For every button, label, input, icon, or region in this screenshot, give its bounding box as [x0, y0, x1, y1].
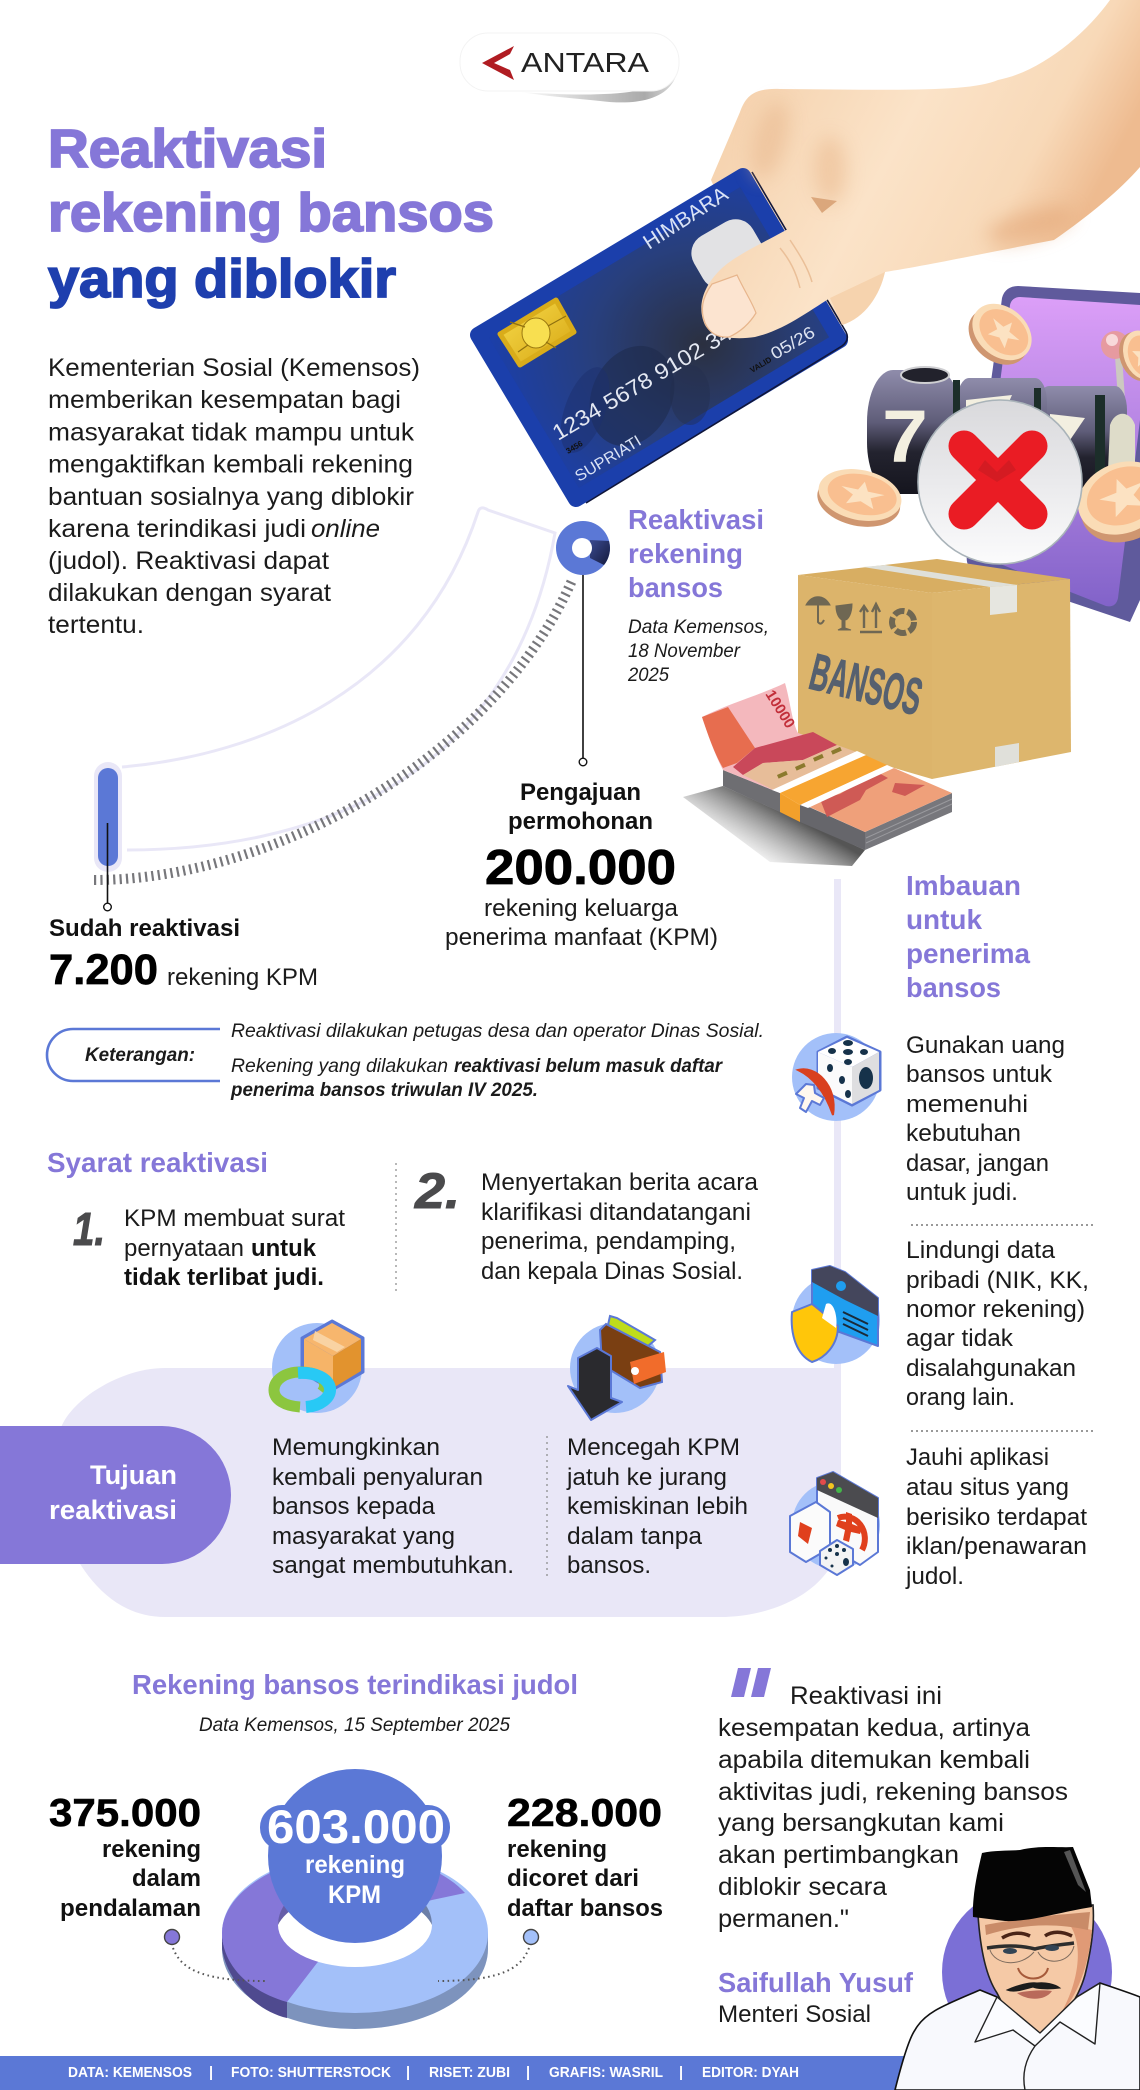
illustration: tablet with slot machine and X: [812, 286, 1140, 622]
stat: sudah reaktivasi 7.200: 7.200: [49, 946, 158, 994]
intro text block: karena terindikasi judi: [48, 515, 306, 543]
hand shading: [744, 97, 1077, 250]
donut chart: 603.000: rekening: [305, 1851, 405, 1879]
intro text block: tertentu.: [48, 611, 144, 639]
title: yang diblokir: [48, 249, 396, 309]
advice 3 text: judol.: [905, 1563, 964, 1590]
box handling symbols: [806, 597, 914, 633]
tujuan text 2: dalam tanpa: [567, 1523, 702, 1550]
heading: reaktivasi rekening bansos: Reaktivasi: [628, 504, 764, 535]
intro text block: [48, 354, 420, 639]
title: Reaktivasi: [48, 119, 327, 179]
note: keterangan: Keterangan:: [85, 1045, 195, 1066]
requirement 2: klarifikasi ditandatangani: [481, 1199, 751, 1226]
bank card: 1234 5678 9102 34: [548, 320, 736, 445]
advice 2 text: [906, 1237, 1089, 1411]
heading: reaktivasi rekening bansos: 18 November: [628, 641, 741, 662]
quote: kesempatan kedua, artinya: [718, 1714, 1030, 1742]
speaker name: Saifullah Yusuf: [718, 1967, 914, 1998]
bank card: 05/26: [767, 323, 818, 363]
stat: sudah reaktivasi 7.200: rekening KPM: [167, 964, 318, 991]
advice 3 text: berisiko terdapat: [906, 1504, 1087, 1531]
intro text block: bantuan sosialnya yang diblokir: [48, 483, 414, 511]
requirement 1: KPM membuat surat: [124, 1205, 345, 1232]
tujuan text 2: bansos.: [567, 1552, 651, 1579]
tujuan text 1: kembali penyaluran: [272, 1464, 483, 1491]
footer credits: |: [526, 2065, 530, 2081]
callout: 375.000: dalam: [132, 1865, 201, 1892]
lever: [1101, 331, 1129, 419]
footer credits: |: [679, 2065, 683, 2081]
hand palm: [711, 0, 1140, 325]
intro text block: online: [311, 515, 380, 543]
callout: 375.000: pendalaman: [60, 1895, 201, 1922]
slot reels: 7: [882, 395, 928, 478]
requirement 2: Menyertakan berita acara: [481, 1169, 758, 1196]
quote: diblokir secara: [718, 1873, 887, 1901]
advice 2 text: agar tidak: [906, 1325, 1014, 1352]
stat: pengajuan permohonan 200.000: penerima manfaat (KPM): [445, 924, 718, 951]
footer credits: GRAFIS: WASRIL: [549, 2065, 663, 2081]
quote: akan pertimbangkan: [718, 1841, 959, 1869]
tujuan text 1: masyarakat yang: [272, 1523, 455, 1550]
stat: sudah reaktivasi 7.200: Sudah reaktivasi: [49, 915, 240, 942]
intro text block: masyarakat tidak mampu untuk: [48, 418, 415, 446]
panel: syarat reaktivasi: [47, 1147, 758, 1291]
callout: 228.000: rekening: [507, 1836, 607, 1863]
tablet: [967, 286, 1140, 622]
advice 3 text: iklan/penawaran: [906, 1533, 1087, 1560]
donut chart: 603.000: [222, 1769, 488, 2029]
footer credits: |: [406, 2065, 410, 2081]
tujuan text 1: [272, 1434, 514, 1579]
panel: tujuan reaktivasi: [0, 1368, 841, 1617]
heading: reaktivasi rekening bansos: rekening: [628, 538, 743, 569]
logo: Antara: ANTARA: [521, 47, 649, 78]
advice 1 text: untuk judi.: [906, 1179, 1018, 1206]
coin top: [957, 292, 1043, 376]
callout: 228.000: 228.000: [507, 1792, 662, 1835]
requirement 1: tidak terlibat judi.: [124, 1264, 324, 1291]
coins: [812, 325, 1140, 555]
stat: pengajuan permohonan 200.000: permohonan: [508, 808, 653, 835]
tujuan text 1: sangat membutuhkan.: [272, 1552, 514, 1579]
footer credits: RISET: ZUBI: [429, 2065, 510, 2081]
marker: applications ring: [556, 521, 610, 766]
quote: permanen.": [718, 1905, 849, 1933]
donut chart: 603.000: 603.000: [267, 1800, 445, 1853]
stat: pengajuan permohonan 200.000: rekening keluarga: [484, 895, 678, 922]
bank card: VALID: [748, 355, 773, 375]
tujuan label pill: Tujuan: [90, 1460, 177, 1490]
illustration: bundle of rupiah money: [683, 683, 952, 866]
note: keterangan: penerima bansos triwulan IV 2025.: [230, 1080, 538, 1101]
stat: pengajuan permohonan 200.000: 200.000: [485, 841, 676, 895]
heading: imbauan: untuk: [906, 904, 982, 935]
requirement 1: 1.: [73, 1203, 105, 1255]
donut hole: [278, 1883, 432, 1967]
requirement 2: penerima, pendamping,: [481, 1228, 736, 1255]
advice 3 text: [905, 1444, 1087, 1590]
quote: yang bersangkutan kami: [718, 1809, 1004, 1837]
callout: 228.000: [438, 1792, 663, 1981]
note: keterangan: Reaktivasi dilakukan petugas desa dan operator Dinas Sosial.: [231, 1021, 764, 1042]
advice 1 text: dasar, jangan: [906, 1150, 1049, 1177]
icon: gambling website window: [790, 1472, 880, 1575]
requirement 1: [73, 1203, 345, 1291]
quote: apabila ditemukan kembali: [718, 1746, 1030, 1774]
bank card: [478, 172, 847, 503]
face: [978, 1905, 1093, 2036]
moustache: [1007, 1983, 1060, 1991]
title: [48, 119, 494, 309]
tujuan text 2: kemiskinan lebih: [567, 1493, 748, 1520]
donut chart: 603.000: KPM: [328, 1881, 381, 1909]
tujuan text 2: [566, 1434, 748, 1579]
speaker name: [718, 1967, 914, 2028]
heading: reaktivasi rekening bansos: 2025: [627, 665, 669, 686]
stat: pengajuan permohonan 200.000: Pengajuan: [520, 779, 641, 806]
requirement 2: [414, 1163, 758, 1285]
heading: reaktivasi rekening bansos: [627, 504, 769, 686]
quote mark: [731, 1668, 771, 1697]
illustration: bansos cardboard box: BANSOS: [804, 643, 928, 727]
heading: imbauan: penerima: [906, 938, 1030, 969]
note: keterangan: reaktivasi belum masuk daftar: [454, 1056, 724, 1077]
vertical divider of advice column: [834, 879, 841, 1374]
footer bar: [0, 2056, 1140, 2090]
advice 3 text: Jauhi aplikasi: [906, 1444, 1049, 1471]
heading: reaktivasi rekening bansos: Data Kemensos,: [628, 617, 769, 638]
illustration: bansos cardboard box: [798, 559, 1071, 779]
icon: id card with shield: [792, 1266, 880, 1364]
advice 3 text: atau situs yang: [906, 1474, 1069, 1501]
quote: aktivitas judi, rekening bansos: [718, 1778, 1068, 1806]
panel: syarat reaktivasi: Syarat reaktivasi: [47, 1147, 268, 1178]
callout: 375.000: 375.000: [49, 1792, 201, 1835]
intro text block: dilakukan dengan syarat: [48, 579, 331, 607]
intro text block: mengaktifkan kembali rekening: [48, 450, 413, 478]
advice 1 text: kebutuhan: [906, 1120, 1021, 1147]
peci hat: [973, 1847, 1092, 1921]
footer credits: DATA: KEMENSOS: [68, 2065, 192, 2081]
bank card: SUPRIATI: [572, 433, 644, 485]
tujuan label pill: [0, 1426, 231, 1564]
advice 1 text: Gunakan uang: [906, 1032, 1065, 1059]
bank card: HIMBARA: [639, 183, 732, 254]
footer credits: FOTO: SHUTTERSTOCK: [231, 2065, 392, 2081]
red X badge: [918, 400, 1082, 564]
title: rekening bansos: [48, 183, 494, 243]
heading: imbauan: Imbauan: [906, 870, 1021, 901]
heading: rekening bansos terindikasi judol: [132, 1669, 578, 1736]
advice 2 text: nomor rekening): [906, 1296, 1085, 1323]
icon: dice with cross: [792, 1033, 880, 1121]
advice 1 text: memenuhi: [906, 1091, 1028, 1118]
intro text block: memberikan kesempatan bagi: [48, 386, 401, 414]
stat: pengajuan permohonan 200.000: [445, 779, 718, 951]
slot reels: [867, 367, 1135, 500]
advice 1 text: bansos untuk: [906, 1061, 1053, 1088]
quote: Reaktivasi ini: [790, 1682, 942, 1710]
callout: 228.000: dicoret dari: [507, 1865, 639, 1892]
callout: 228.000: daftar bansos: [507, 1895, 663, 1922]
tujuan text 1: Memungkinkan: [272, 1434, 440, 1461]
advice 2 text: orang lain.: [906, 1384, 1015, 1411]
note: keterangan: [47, 1021, 764, 1101]
requirement 2: 2.: [414, 1163, 460, 1219]
centre ball: [268, 1769, 442, 1943]
tujuan text 2: jatuh ke jurang: [566, 1464, 727, 1491]
collar: [975, 1983, 1100, 2090]
logo: Antara: [460, 33, 679, 102]
illustration: hand holding bank card: [478, 0, 1140, 503]
tujuan label pill: reaktivasi: [49, 1495, 177, 1525]
icon: box with recycle arrows: [272, 1321, 363, 1413]
requirement 1: pernyataan: [124, 1235, 244, 1262]
speaker name: Menteri Sosial: [718, 2001, 871, 2028]
requirement 1: untuk: [251, 1235, 317, 1262]
callout: 375.000: [49, 1792, 265, 1981]
note: keterangan: Rekening yang dilakukan: [231, 1056, 448, 1077]
footer credits: EDITOR: DYAH: [702, 2065, 799, 2081]
tujuan text 2: Mencegah KPM: [567, 1434, 740, 1461]
illustration: bundle of rupiah money: 10000: [762, 687, 798, 731]
thumb: [701, 190, 905, 338]
glasses: [987, 1943, 1074, 1963]
icon: wallet with falling arrow: [568, 1316, 666, 1420]
bank card: 3456: [564, 439, 585, 456]
advice 1 text: [906, 1032, 1065, 1206]
heading: rekening bansos terindikasi judol: Rekening bansos terindikasi judol: [132, 1669, 578, 1700]
heading: imbauan: [906, 870, 1030, 1003]
advice 2 text: disalahgunakan: [906, 1355, 1076, 1382]
callout: 375.000: rekening: [102, 1836, 201, 1863]
advice 2 text: Lindungi data: [906, 1237, 1055, 1264]
requirement 2: dan kepala Dinas Sosial.: [481, 1258, 743, 1285]
heading: rekening bansos terindikasi judol: Data Kemensos, 15 September 2025: [199, 1715, 510, 1736]
tujuan text 1: bansos kepada: [272, 1493, 435, 1520]
advice 2 text: pribadi (NIK, KK,: [906, 1267, 1089, 1294]
heading: reaktivasi rekening bansos: bansos: [628, 572, 723, 603]
intro text block: (judol). Reaktivasi dapat: [48, 547, 329, 575]
quote: [718, 1668, 1068, 1933]
donut side wall: [222, 1933, 488, 2029]
timeline curve: [94, 508, 573, 880]
footer credits: [68, 2065, 799, 2081]
heading: imbauan: bansos: [906, 972, 1001, 1003]
marker: already reactivated bar: [94, 762, 122, 911]
shirt: [895, 1983, 1140, 2090]
footer credits: |: [209, 2065, 213, 2081]
portrait: Saifullah Yusuf: [895, 1847, 1140, 2090]
stat: sudah reaktivasi 7.200: [49, 915, 318, 994]
donut top: [222, 1853, 488, 2013]
intro text block: Kementerian Sosial (Kemensos): [48, 354, 420, 382]
